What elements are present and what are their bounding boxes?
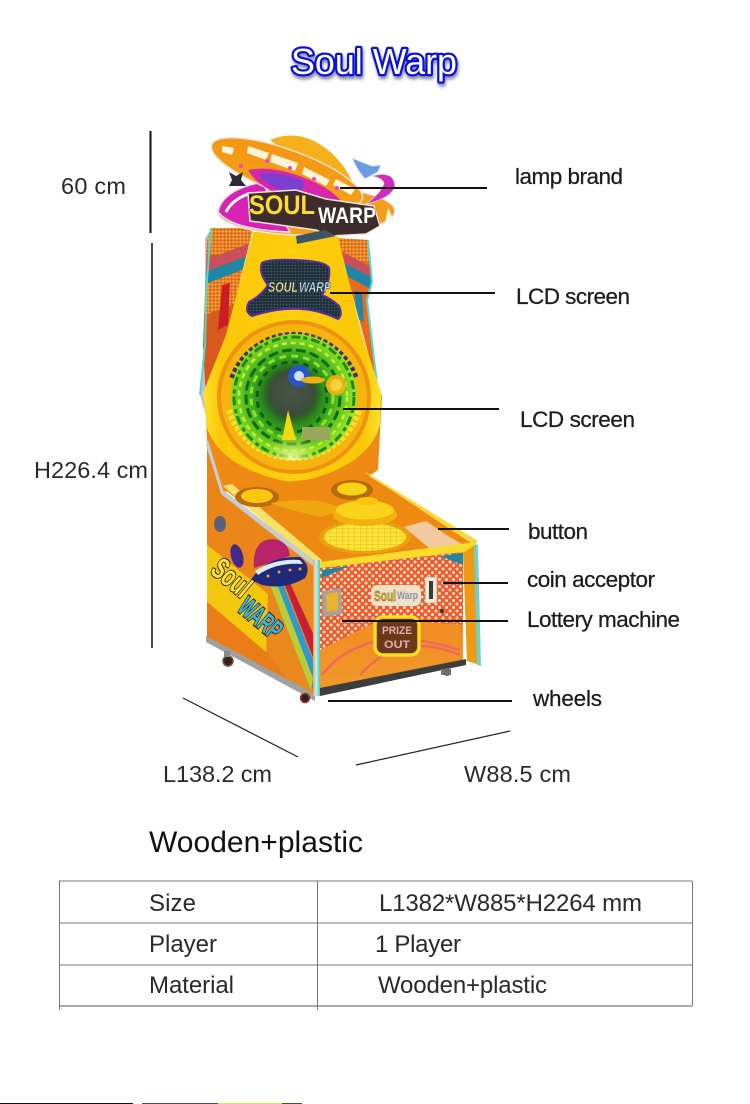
row: player: 1 Player [375, 931, 461, 958]
yellow front panel [203, 232, 381, 483]
side buttons [404, 521, 462, 549]
panel UFO beam [270, 586, 313, 690]
dimension: width: W88.5 cm [464, 761, 571, 787]
UFO saucer [204, 124, 370, 220]
control deck [223, 472, 478, 570]
row: player [149, 931, 461, 958]
marquee screen: SOUL [268, 279, 298, 296]
callout: wheels: wheels [532, 686, 602, 711]
callout: button: button [528, 519, 588, 544]
next section edge strip [0, 1103, 302, 1104]
marquee screen [247, 260, 341, 319]
sign post [296, 230, 336, 244]
right side strip [463, 544, 480, 665]
dimension: length: L138.2 cm [163, 761, 272, 787]
target plate [319, 520, 411, 554]
cabinet side wings [200, 225, 385, 420]
row: player: Player [149, 931, 217, 958]
UFO ring [217, 174, 395, 235]
front rail [320, 542, 478, 570]
prize out window: PRIZE [382, 625, 412, 637]
wheels [223, 651, 451, 702]
arcade machine illustration [200, 124, 481, 702]
callout: upper LCD screen: LCD screen [516, 284, 630, 309]
mini logo: Warp [397, 590, 418, 602]
cabinet mid back [205, 395, 382, 492]
coin acceptor [425, 577, 437, 603]
left button [235, 487, 279, 507]
material heading: Wooden+plastic [149, 826, 363, 859]
dimension: width [356, 731, 571, 787]
round LCD screen [217, 320, 371, 474]
rear button [331, 480, 373, 500]
dimension: sign height [61, 131, 150, 233]
title: Soul Warp [291, 41, 457, 82]
row: material [149, 972, 547, 999]
row: material: Wooden+plastic [378, 972, 547, 999]
panel UFO [251, 539, 308, 586]
marquee screen: WARP [299, 279, 332, 296]
row: material: Material [149, 972, 234, 999]
row: size [149, 890, 642, 917]
small star and ship [229, 172, 246, 186]
base and corner edge [206, 440, 466, 701]
mini logo [371, 585, 421, 606]
dimension: sign height: 60 cm [61, 173, 126, 199]
front panel [320, 552, 463, 690]
left side panel: WARP [232, 591, 289, 645]
lamp brand sign [204, 124, 395, 244]
left side panel: Soul [205, 552, 258, 604]
specification table [59, 881, 692, 1010]
dimension: length [163, 698, 298, 787]
lottery ticket outlet [322, 588, 342, 617]
callout: lamp brand: lamp brand [515, 164, 623, 189]
callout: lottery machine: Lottery machine [527, 607, 680, 632]
logo plaque: SOUL [249, 190, 315, 220]
prize out window: OUT [384, 639, 410, 651]
centre dome [333, 497, 397, 526]
logo plaque: WARP [318, 203, 376, 228]
row: size: Size [149, 890, 196, 917]
left side panel [205, 440, 316, 700]
logo plaque [248, 190, 380, 236]
prize out window [375, 617, 419, 655]
UFO dome [270, 136, 358, 196]
callout: coin acceptor: coin acceptor [527, 567, 656, 592]
row: size: L1382*W885*H2264 mm [379, 890, 642, 917]
callout: lower LCD screen: LCD screen [520, 407, 635, 432]
mini logo: Soul [374, 588, 396, 605]
dimension: cabinet height: H226.4 cm [34, 457, 148, 483]
